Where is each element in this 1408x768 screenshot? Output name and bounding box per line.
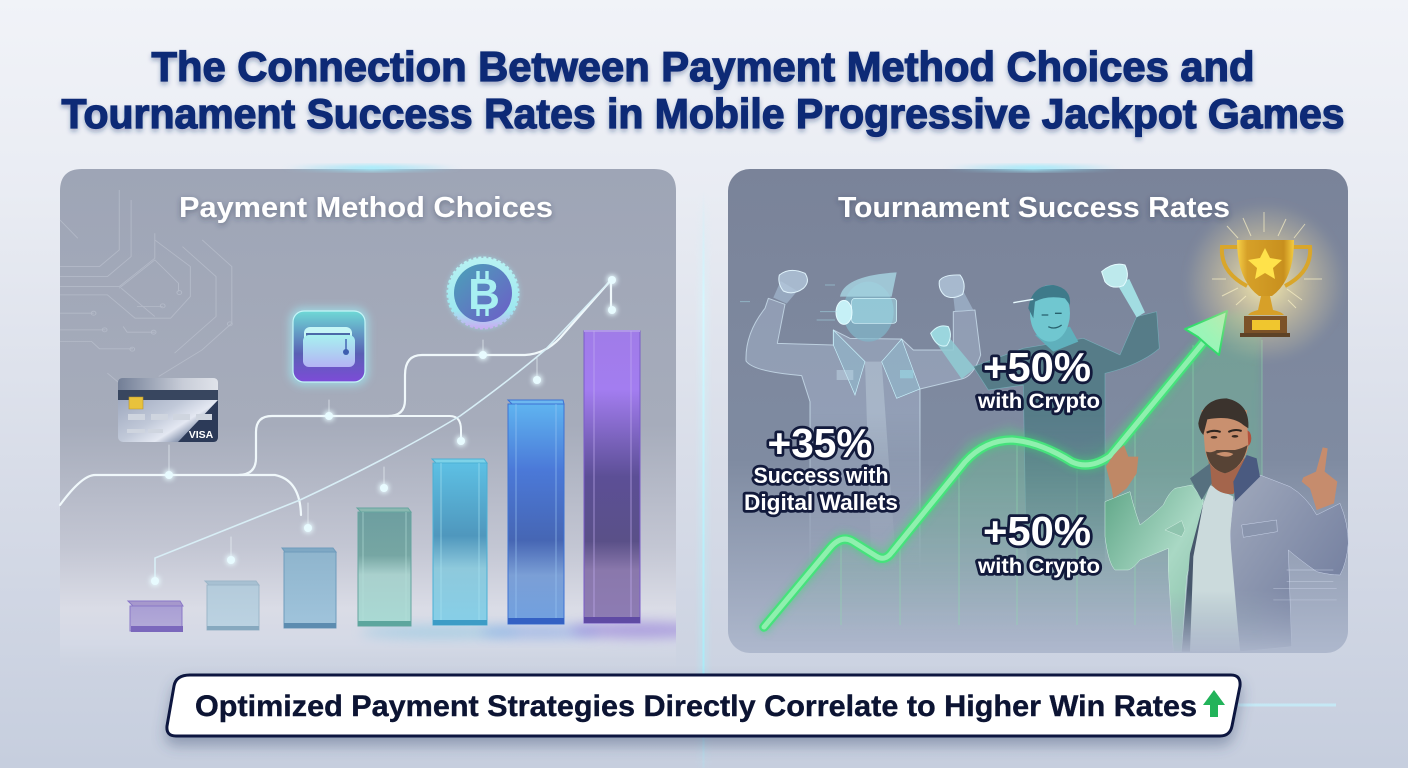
stat: +35% digital wallets: Digital Wallets: [744, 490, 898, 515]
glowing nodes: [151, 276, 616, 585]
stat: +35% digital wallets: [744, 420, 898, 515]
stat: +50% crypto lower: [977, 508, 1100, 578]
stat: +50% crypto upper: [977, 344, 1100, 413]
floor shadows: [360, 622, 710, 638]
bar 2: [205, 581, 259, 630]
light streak right of banner: [1238, 704, 1336, 706]
center vertical light line: [698, 190, 709, 768]
head: [1242, 430, 1251, 446]
title: The Connection Between Payment Method Choices and: [152, 43, 1254, 90]
panel heading: Payment Method Choices: [179, 192, 553, 224]
panel: payment method choices: [59, 163, 676, 642]
stat: +50% crypto lower: +50%: [983, 508, 1091, 554]
banner text: Optimized Payment Strategies Directly Correlate to Higher Win Rates: [195, 690, 1197, 723]
person pointing up: [1105, 398, 1348, 652]
icon: trophy: [1185, 202, 1345, 362]
icon: bitcoin coin: B: [468, 270, 500, 319]
pocket details: [1165, 521, 1185, 537]
green glow under curve: [828, 314, 1262, 564]
circuit pattern: [60, 190, 232, 386]
stat: +35% digital wallets: Success with: [754, 463, 888, 488]
collars: [1190, 463, 1212, 500]
bar 3: [282, 548, 336, 628]
neck: [1208, 458, 1248, 494]
panel heading: Tournament Success Rates: [838, 192, 1230, 224]
icon: credit card: [118, 378, 218, 442]
shirt: [1182, 503, 1203, 652]
stat: +50% crypto upper: +50%: [983, 344, 1091, 390]
green jacket side: [1105, 485, 1203, 652]
glowing route lines: [60, 280, 611, 581]
bar 5: [432, 459, 487, 625]
bar 1: [128, 601, 183, 632]
icon: bitcoin coin: [446, 256, 520, 330]
icon: green up arrow: [1203, 690, 1225, 717]
callout banner: [167, 675, 1240, 736]
hologram figure: right celebrating man: [931, 264, 1159, 572]
bar 7: [584, 331, 640, 623]
bar 6: [508, 400, 564, 624]
hands: [1106, 445, 1138, 498]
title: Tournament Success Rates in Mobile Progressive Jackpot Games: [62, 90, 1344, 137]
bar chart: [128, 331, 640, 632]
stat: +35% digital wallets: +35%: [768, 420, 872, 466]
panel: tournament success rates: [728, 165, 1348, 653]
bar 4: [357, 508, 411, 626]
green growth arrow: [764, 311, 1227, 627]
grey jacket side: [1230, 475, 1348, 652]
icon: credit card: VISA: [189, 429, 214, 441]
icon: wallet: [289, 307, 369, 386]
title: [62, 43, 1344, 137]
green chart columns: [841, 340, 1262, 625]
stat: +50% crypto lower: with Crypto: [977, 555, 1100, 578]
hologram figure: left celebrating man: [740, 270, 981, 572]
stat: +50% crypto upper: with Crypto: [977, 390, 1100, 413]
